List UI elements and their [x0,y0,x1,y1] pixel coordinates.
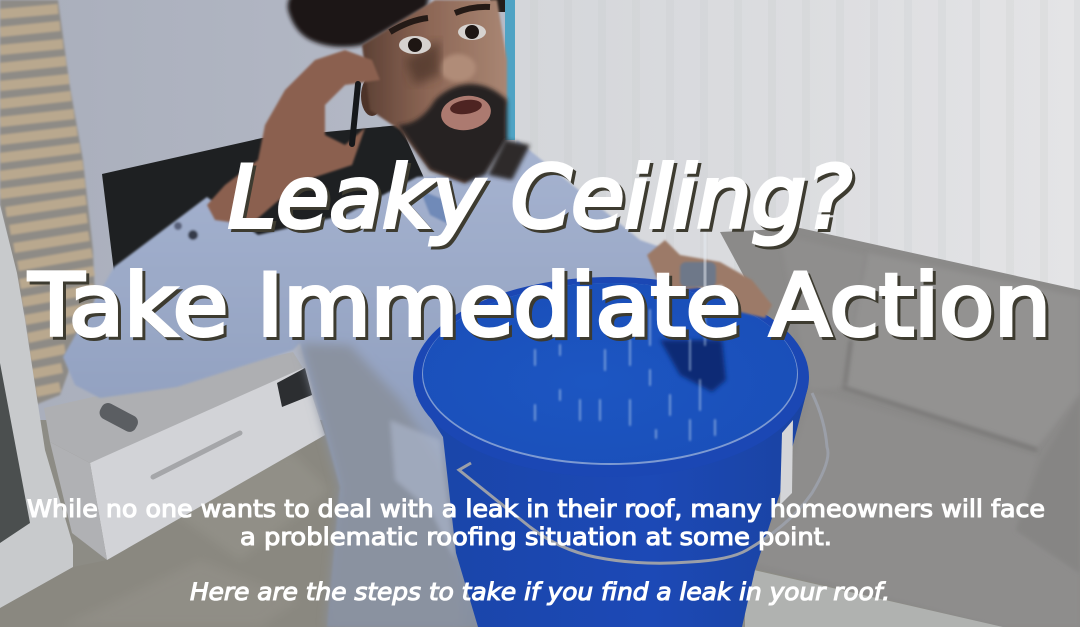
sofa [720,228,1080,627]
call to action text: Here are the steps to take if you find a leak in your roof. [190,578,890,606]
title line 1 shadow: Leaky Ceiling? [231,151,855,251]
water splashes [535,300,715,440]
icon: remote control [97,401,140,434]
intro text: While no one wants to deal with a leak in their roof, many homeowners will face [27,495,1045,523]
wooden slat wall [0,0,95,405]
white inner bucket edge [780,420,793,505]
bucket [413,277,828,627]
title [28,148,1054,359]
floor [0,435,345,627]
man: arm and shirt [63,140,660,627]
title line 2 shadow: Take Immediate Action [31,259,1054,359]
title line 2: Take Immediate Action [28,256,1051,356]
intro text [27,495,1045,551]
TV cabinet [44,352,325,560]
intro text: a problematic roofing situation at some point. [240,523,832,551]
bucket handle [459,393,828,563]
man: head and hair [288,0,530,183]
title line 1: Leaky Ceiling? [228,148,852,248]
floor strip under sofa [745,568,1003,627]
hand with rag and water stream [647,230,772,318]
left white cabinet [0,205,73,608]
man: hand holding phone [207,50,380,225]
television and dark backdrop [102,125,425,272]
dark reflection in bucket [660,340,726,392]
